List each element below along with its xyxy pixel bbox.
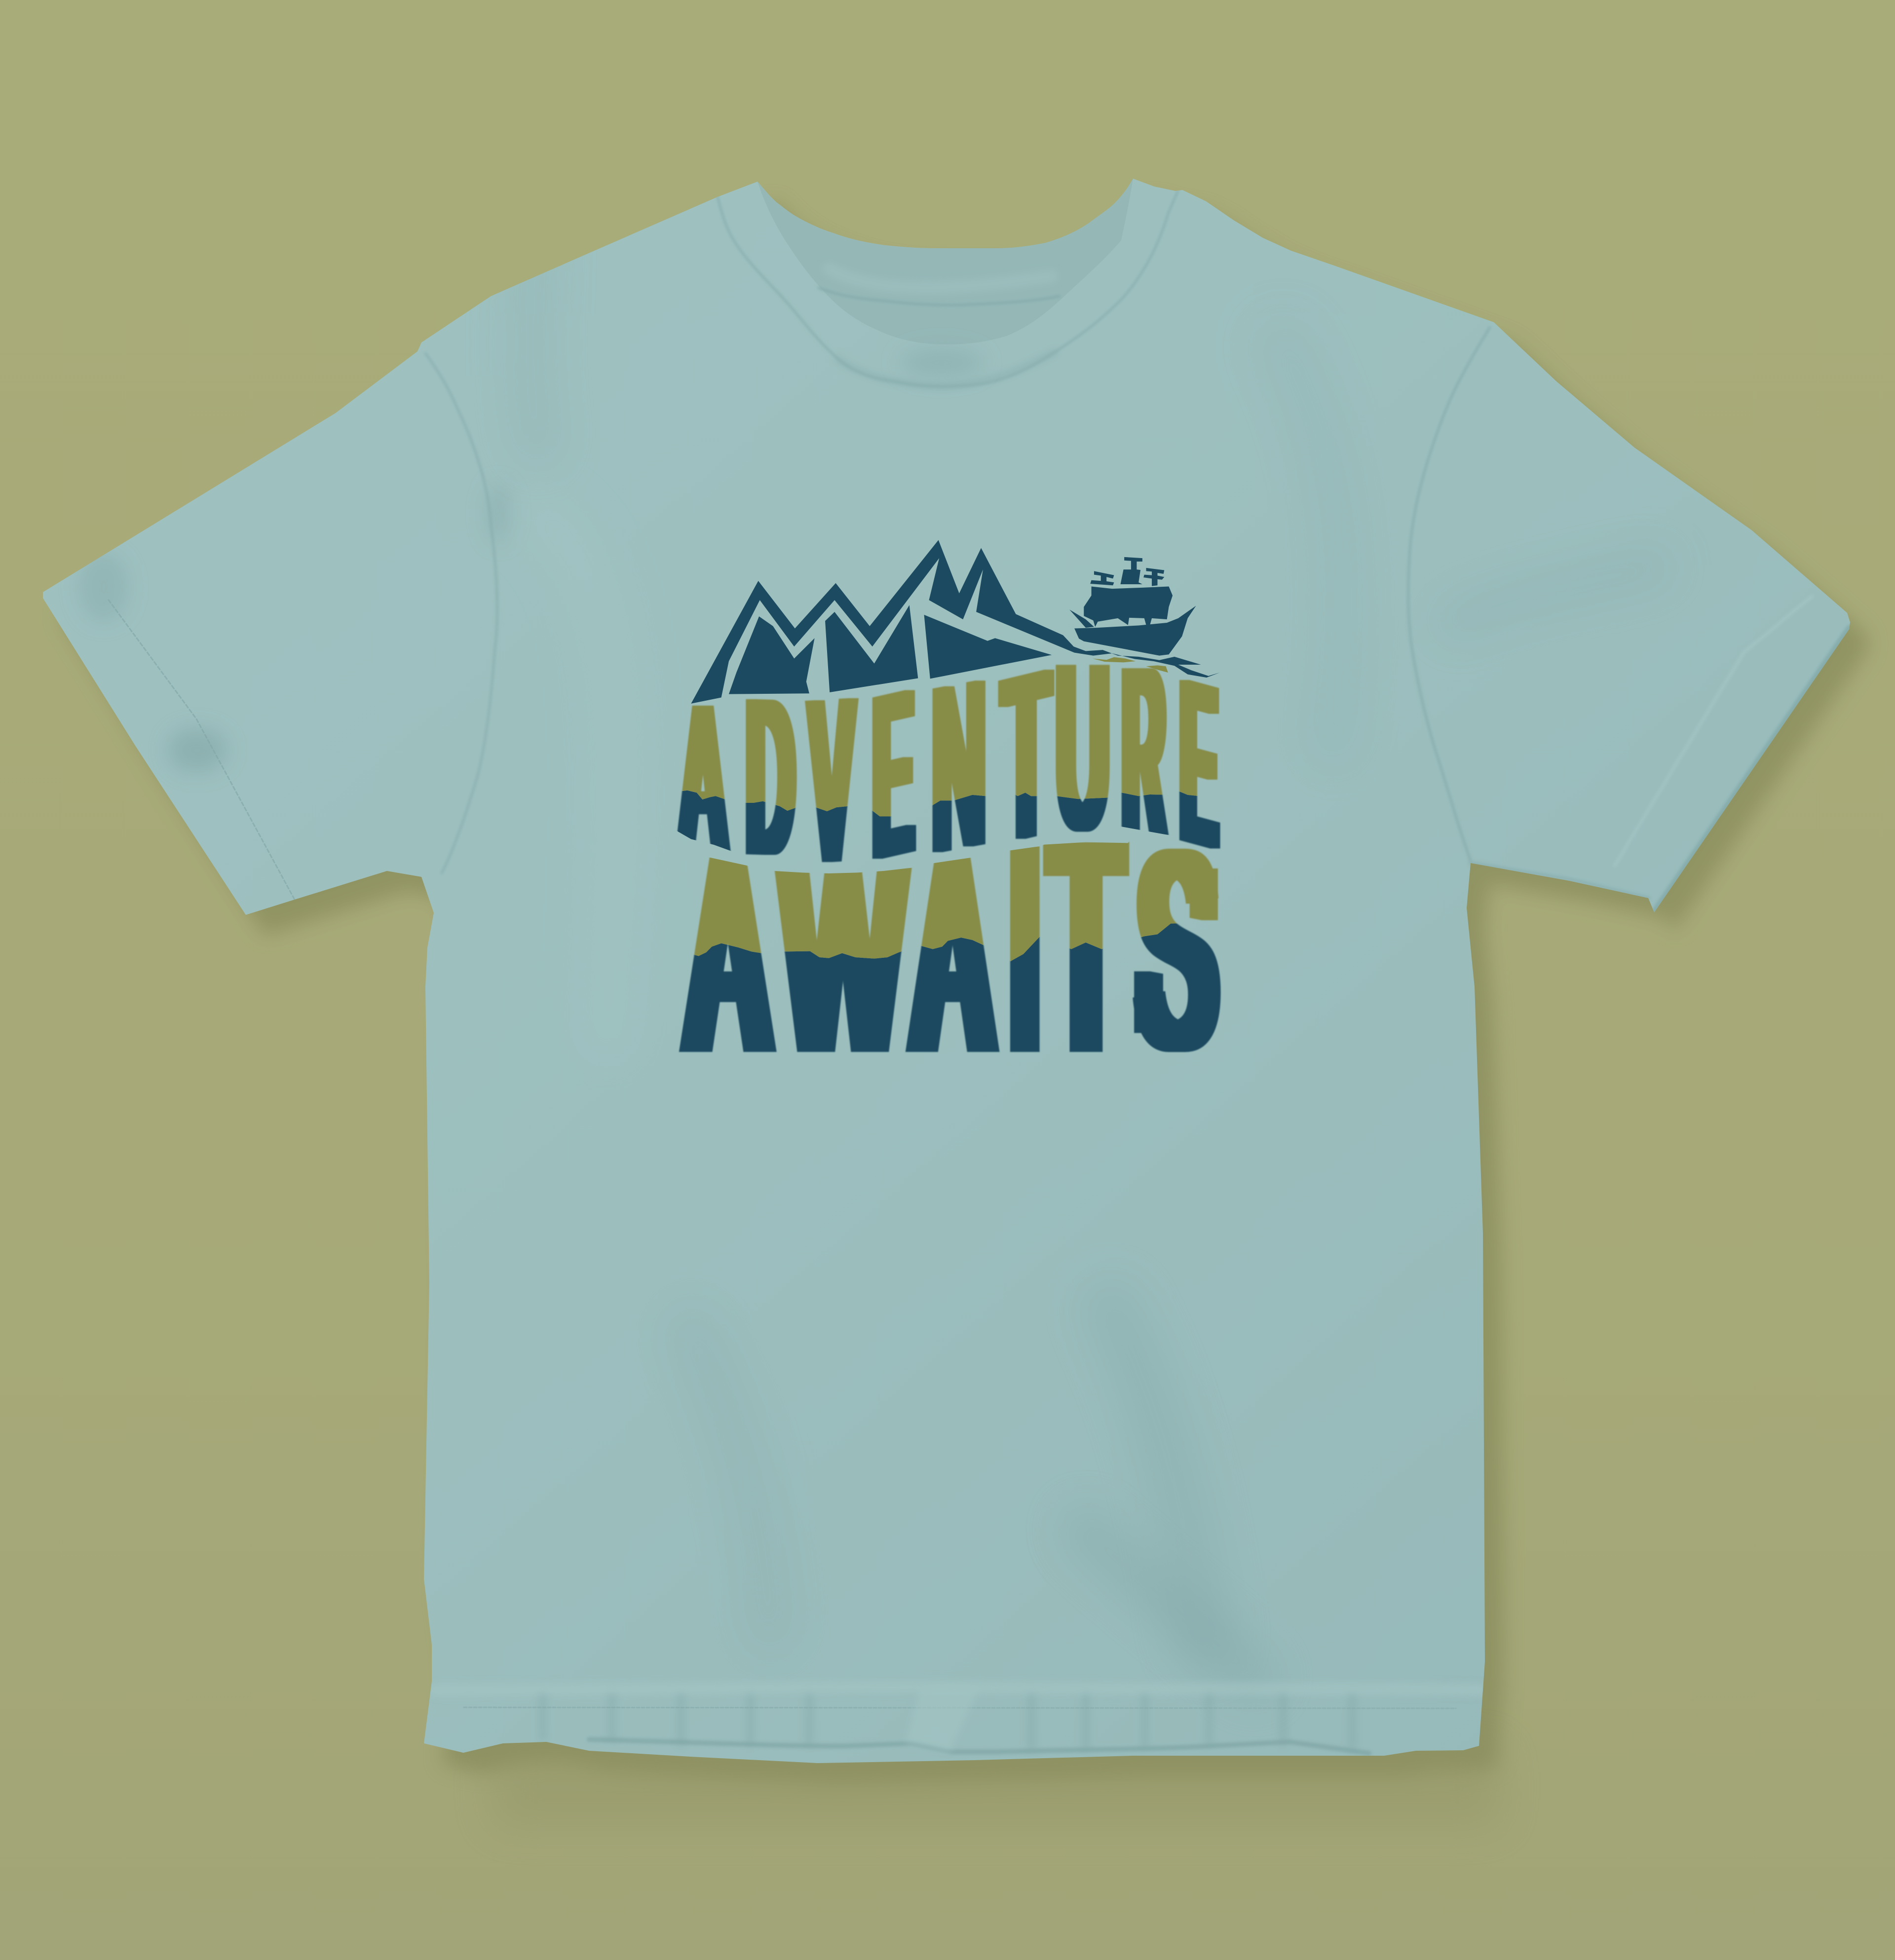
word: ADVENTURE, navy lower half: U [1056, 614, 1109, 882]
fabric folds and seams [79, 148, 1850, 1753]
word: AWAITS, olive upper half [684, 778, 1217, 1119]
hem highlight band [434, 1687, 1480, 1690]
word: ADVENTURE, navy lower half: N [933, 629, 985, 905]
left sleeve seam [425, 353, 497, 873]
hem pleats [543, 1697, 1352, 1747]
word: ADVENTURE, navy lower half: R [1123, 617, 1165, 889]
icon: mountains [691, 540, 1220, 704]
inner back of neck [758, 179, 1133, 343]
word: ADVENTURE, navy lower half: T [1002, 619, 1050, 895]
word: AWAITS, navy lower half: A [910, 797, 995, 1114]
olive waterline flecks [1093, 657, 1168, 673]
word: AWAITS, navy lower half: T [1050, 777, 1123, 1119]
back collar band highlight [829, 269, 1051, 288]
print graphic: adventure awaits [678, 540, 1220, 1119]
word: ADVENTURE, navy lower half: E [1180, 630, 1217, 901]
collar front centre shade [900, 348, 984, 377]
sleeve shade patches [168, 728, 227, 772]
word: ADVENTURE, navy lower half: A [678, 661, 727, 898]
word: ADVENTURE, navy lower half: V [809, 648, 854, 915]
hem centre pleat [906, 1688, 980, 1752]
word: ADVENTURE, olive upper half [678, 614, 1217, 915]
body wrinkles [691, 1332, 770, 1628]
word: AWAITS, navy lower half: A [684, 797, 772, 1114]
word: AWAITS, navy lower half: I [1012, 783, 1038, 1118]
word: AWAITS, navy lower half [684, 778, 1217, 1119]
word: AWAITS, navy lower half: S [1137, 791, 1217, 1112]
icon: sailing ship [1069, 557, 1196, 656]
hem stitching [464, 1707, 1456, 1708]
collar outer seam [718, 191, 1178, 386]
right sleeve seam [1408, 327, 1490, 861]
back collar rib [819, 288, 1060, 305]
shirt shadow [62, 199, 1869, 1784]
shirt body [43, 179, 1850, 1763]
right cuff seam [1615, 596, 1812, 866]
word: AWAITS, navy lower half: W [782, 811, 905, 1111]
collar lower edge shade [838, 352, 1055, 386]
t-shirt [43, 148, 1850, 1763]
hem soft shadow [493, 1747, 1500, 1826]
word: ADVENTURE, navy lower half: E [873, 640, 913, 911]
word: ADVENTURE, navy lower half [678, 614, 1217, 915]
right cuff underside [1654, 629, 1850, 914]
left cuff stitching [109, 600, 295, 900]
word: ADVENTURE, navy lower half: D [746, 651, 795, 905]
hem lower fold [589, 1739, 1369, 1753]
